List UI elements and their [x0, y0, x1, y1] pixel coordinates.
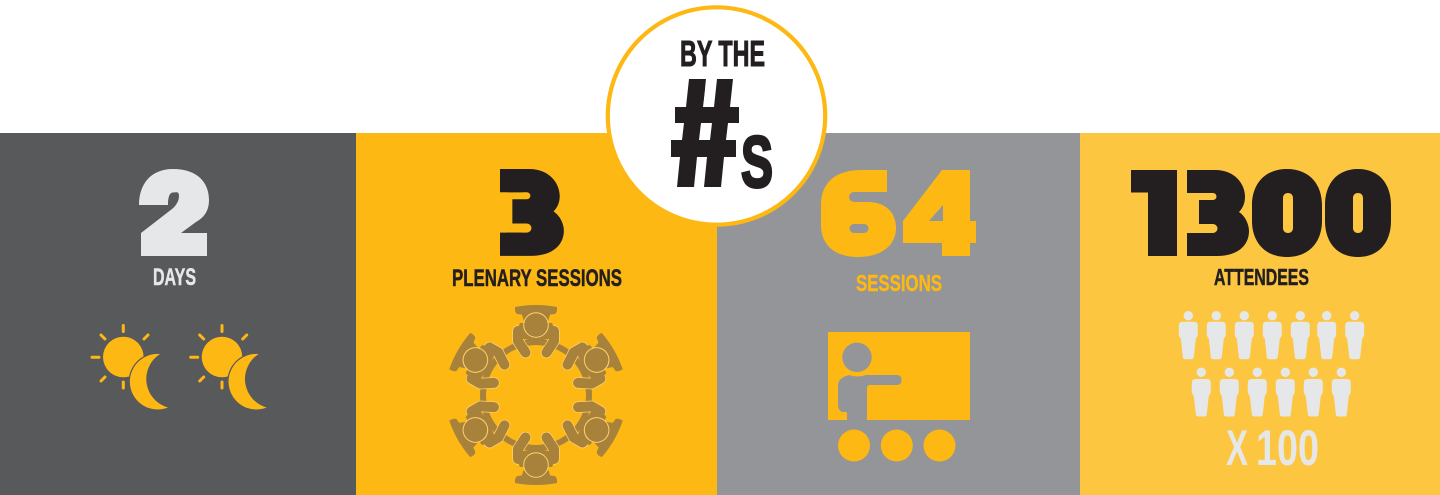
- panel: 3 plenary sessions: [356, 133, 717, 495]
- panel: 64 sessions: [717, 133, 1080, 495]
- icon: round table with six people: [447, 305, 625, 485]
- panel: 1300 attendees: [1080, 133, 1440, 495]
- number: 1300: 3: [1189, 156, 1246, 272]
- label: attendees: ATTENDEES: [1214, 264, 1309, 290]
- number: 64: 4: [911, 156, 969, 272]
- number: 1300: 0: [1258, 156, 1316, 272]
- number: 1300: 1: [1127, 156, 1185, 272]
- label: sessions: SESSIONS: [856, 270, 942, 296]
- number: 1300: 0: [1329, 156, 1387, 272]
- heading: hash sign: #: [675, 56, 738, 213]
- icon: presenter at a board with audience: [828, 332, 970, 462]
- label: x 100: X: [1226, 420, 1248, 476]
- number: 1300: [1131, 169, 1391, 257]
- label: plenary sessions: PLENARY SESSIONS: [452, 265, 622, 292]
- icon: sun and moon, first day: [92, 326, 168, 410]
- number: 64: [821, 170, 976, 257]
- label: x 100: 100: [1256, 420, 1319, 476]
- label: days: DAYS: [153, 264, 196, 291]
- number: 64: 6: [829, 156, 887, 272]
- label: x 100: [1226, 420, 1319, 476]
- number: 3: 3: [503, 156, 561, 272]
- heading: by the: BY THE: [680, 33, 765, 74]
- icon: rows of people: [1179, 311, 1364, 416]
- badge: by the #s: [608, 7, 825, 225]
- icon: sun and moon, second day: [191, 326, 267, 410]
- heading: letter s: S: [741, 123, 773, 203]
- number: 2: 2: [145, 156, 203, 272]
- panel: 2 days: [0, 133, 356, 495]
